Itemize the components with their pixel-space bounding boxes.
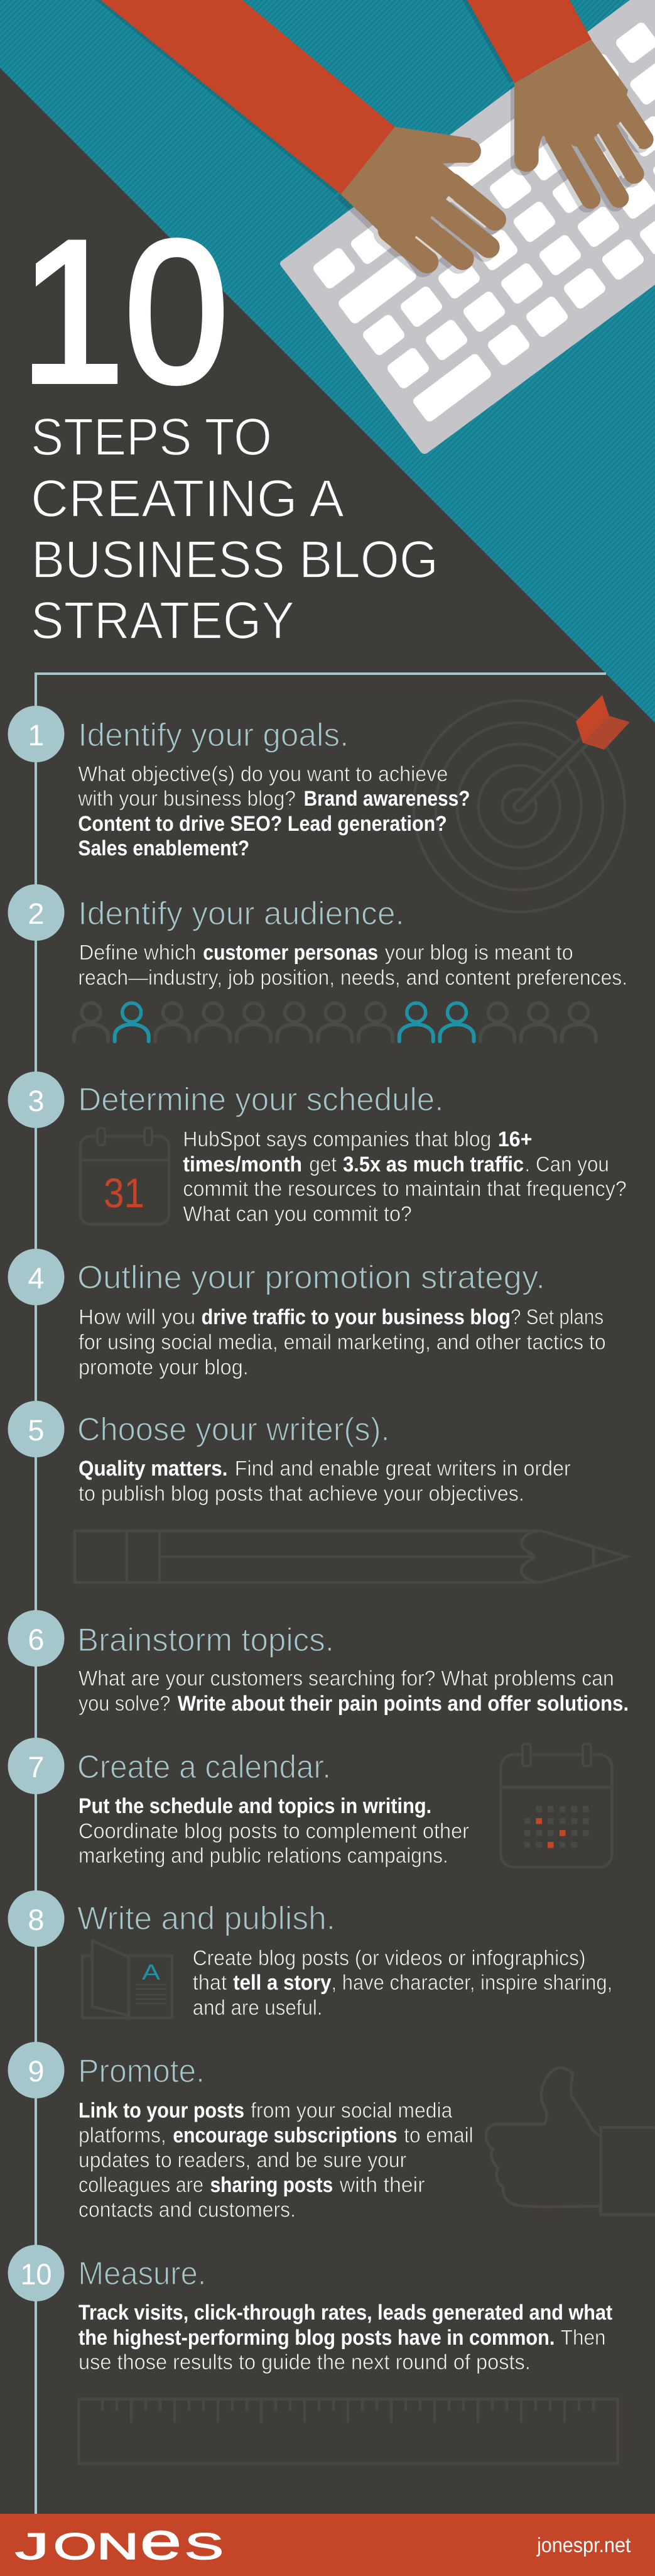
icon: pencil bbox=[75, 1531, 627, 1582]
step 2 bbox=[8, 884, 627, 1041]
heading 4: Outline your promotion strategy. bbox=[77, 1259, 545, 1296]
body text 7: Put the schedule and topics in writing. bbox=[78, 1794, 431, 1818]
number badge 4: 4 bbox=[28, 1261, 45, 1295]
body text 9: updates to readers, and be sure your bbox=[78, 2148, 406, 2172]
body text 3: . Can you bbox=[525, 1153, 609, 1176]
title: STRATEGY bbox=[31, 591, 295, 650]
body text 1: Content to drive SEO? Lead generation? bbox=[78, 812, 447, 836]
number badge 9: 9 bbox=[28, 2054, 45, 2088]
body text 1: with your business blog? bbox=[77, 787, 296, 811]
icon: thumbs up bbox=[486, 2068, 655, 2215]
step 1 bbox=[8, 695, 630, 912]
body text 1: What objective(s) do you want to achieve bbox=[78, 762, 448, 786]
title: BUSINESS BLOG bbox=[31, 530, 438, 589]
number badge 2: 2 bbox=[28, 897, 45, 930]
number badge 5 bbox=[8, 1401, 64, 1457]
body text 9: encourage subscriptions bbox=[173, 2124, 398, 2147]
body text 9 bbox=[78, 2099, 474, 2222]
title: STEPS TO bbox=[31, 407, 272, 466]
body text 5: Quality matters. bbox=[78, 1457, 227, 1481]
logo: JONES: O bbox=[53, 2526, 97, 2567]
icon: calendar with dots bbox=[501, 1744, 612, 1867]
heading 10: Measure. bbox=[78, 2255, 206, 2292]
body text 8: and are useful. bbox=[193, 1996, 323, 2020]
number badge 2 bbox=[8, 884, 64, 941]
body text 1 bbox=[77, 762, 470, 860]
logo: JONES: J bbox=[15, 2526, 49, 2567]
body text 8: , have character, inspire sharing, bbox=[332, 1971, 612, 1995]
icon: open book: A bbox=[142, 1960, 161, 1985]
number badge 10: 10 bbox=[20, 2257, 51, 2291]
heading 7: Create a calendar. bbox=[77, 1749, 331, 1785]
step 5 bbox=[8, 1401, 627, 1582]
number badge 8: 8 bbox=[28, 1903, 45, 1936]
body text 3: 3.5x as much traffic bbox=[343, 1153, 524, 1176]
logo: JONES: e bbox=[140, 2512, 181, 2570]
heading 6: Brainstorm topics. bbox=[77, 1622, 334, 1658]
step 7 bbox=[8, 1738, 612, 1868]
number badge 3 bbox=[8, 1072, 64, 1128]
body text 4: drive traffic to your business blog bbox=[202, 1305, 511, 1329]
body text 2 bbox=[78, 941, 627, 990]
body text 7: Coordinate blog posts to complement other bbox=[78, 1819, 469, 1843]
heading 3: Determine your schedule. bbox=[78, 1082, 443, 1118]
body text 3: commit the resources to maintain that frequency? bbox=[183, 1177, 627, 1201]
number badge 4 bbox=[8, 1249, 64, 1305]
number badge 9 bbox=[8, 2042, 64, 2098]
title bbox=[20, 199, 438, 650]
body text 9: to email bbox=[404, 2124, 474, 2147]
body text 9: with their bbox=[339, 2173, 425, 2197]
heading 2: Identify your audience. bbox=[78, 896, 404, 932]
body text 3: get bbox=[309, 1153, 337, 1176]
body text 8: tell a story bbox=[233, 1971, 332, 1995]
body text 5: Find and enable great writers in order bbox=[235, 1457, 571, 1481]
body text 3: HubSpot says companies that blog bbox=[183, 1127, 491, 1151]
icon: calendar 31 bbox=[80, 1128, 169, 1224]
body text 2: your blog is meant to bbox=[385, 941, 573, 965]
body text 8: Create blog posts (or videos or infographics) bbox=[193, 1946, 586, 1970]
body text 3: times/month bbox=[183, 1153, 302, 1176]
body text 1: Brand awareness? bbox=[304, 787, 470, 811]
number badge 1 bbox=[8, 706, 64, 762]
step 6 bbox=[8, 1610, 629, 1716]
heading 1: Identify your goals. bbox=[78, 717, 349, 754]
body text 9: from your social media bbox=[251, 2099, 452, 2123]
body text 6 bbox=[78, 1667, 629, 1716]
number badge 7: 7 bbox=[28, 1750, 45, 1784]
icon row: customer personas bbox=[74, 1003, 596, 1041]
body text 7: marketing and public relations campaigns. bbox=[78, 1844, 448, 1868]
body text 4 bbox=[78, 1305, 606, 1379]
body text 8 bbox=[193, 1946, 612, 2020]
body text 9: sharing posts bbox=[210, 2173, 333, 2197]
body text 4: promote your blog. bbox=[78, 1356, 249, 1379]
body text 3: 16+ bbox=[498, 1127, 533, 1151]
left arm and hand bbox=[95, 0, 495, 274]
body text 10: Track visits, click-through rates, leads generated and what bbox=[78, 2301, 612, 2325]
keyboard illustration bbox=[280, 0, 655, 454]
body text 4: ? Set plans bbox=[511, 1305, 604, 1329]
heading 8: Write and publish. bbox=[77, 1900, 335, 1937]
body text 10: use those results to guide the next round of posts. bbox=[78, 2350, 531, 2374]
body text 4: for using social media, email marketing, and other tactics to bbox=[78, 1330, 606, 1354]
website url: jonespr.net bbox=[536, 2533, 631, 2557]
step 4 bbox=[8, 1249, 606, 1379]
body text 9: colleagues are bbox=[78, 2173, 203, 2197]
body text 2: reach—industry, job position, needs, and content preferences. bbox=[78, 966, 627, 990]
body text 10: Then bbox=[561, 2326, 606, 2350]
step 9 bbox=[8, 2042, 655, 2222]
icon: target with arrow bbox=[414, 695, 630, 912]
body text 6: What are your customers searching for? What problems can bbox=[78, 1667, 614, 1691]
step 8 bbox=[8, 1890, 612, 2020]
title: CREATING A bbox=[31, 469, 344, 528]
teal striped diagonal header bbox=[0, 0, 655, 723]
number badge 7 bbox=[8, 1738, 64, 1794]
body text 2: Define which bbox=[79, 941, 197, 965]
body text 10: the highest-performing blog posts have in common. bbox=[78, 2326, 555, 2350]
body text 10 bbox=[78, 2301, 612, 2374]
number badge 6 bbox=[8, 1610, 64, 1667]
body text 9: contacts and customers. bbox=[78, 2198, 296, 2222]
heading 5: Choose your writer(s). bbox=[77, 1411, 390, 1448]
number badge 6: 6 bbox=[28, 1623, 45, 1656]
body text 4: How will you bbox=[78, 1305, 195, 1329]
body text 3 bbox=[183, 1127, 627, 1226]
number badge 8 bbox=[8, 1890, 64, 1947]
step 10 bbox=[8, 2245, 618, 2464]
icon: ruler bbox=[79, 2399, 618, 2464]
number badge 1: 1 bbox=[28, 718, 45, 752]
body text 8: that bbox=[193, 1971, 227, 1995]
step 3 bbox=[8, 1072, 627, 1226]
heading 9: Promote. bbox=[78, 2053, 205, 2090]
logo: JONES bbox=[15, 2512, 224, 2570]
number badge 5: 5 bbox=[28, 1413, 45, 1447]
number badge 3: 3 bbox=[28, 1084, 45, 1117]
logo: JONES: S bbox=[185, 2526, 224, 2567]
timeline line bbox=[36, 674, 606, 2514]
body text 5: to publish blog posts that achieve your objectives. bbox=[78, 1482, 524, 1506]
title: 10 bbox=[20, 199, 229, 425]
right arm and hand bbox=[462, 0, 644, 203]
body text 3: What can you commit to? bbox=[183, 1202, 412, 1226]
body text 9: Link to your posts bbox=[78, 2099, 244, 2123]
icon: calendar 31: 31 bbox=[104, 1170, 144, 1216]
body text 1: Sales enablement? bbox=[78, 836, 249, 860]
body text 2: customer personas bbox=[203, 941, 378, 965]
logo: JONES: N bbox=[97, 2526, 139, 2567]
footer bar bbox=[0, 2512, 655, 2576]
number badge 10 bbox=[8, 2245, 64, 2301]
icon: open book bbox=[82, 1941, 172, 2018]
body text 9: platforms, bbox=[78, 2124, 166, 2147]
body text 6: you solve? bbox=[78, 1692, 170, 1716]
body text 7 bbox=[78, 1794, 469, 1868]
body text 5 bbox=[78, 1457, 571, 1506]
